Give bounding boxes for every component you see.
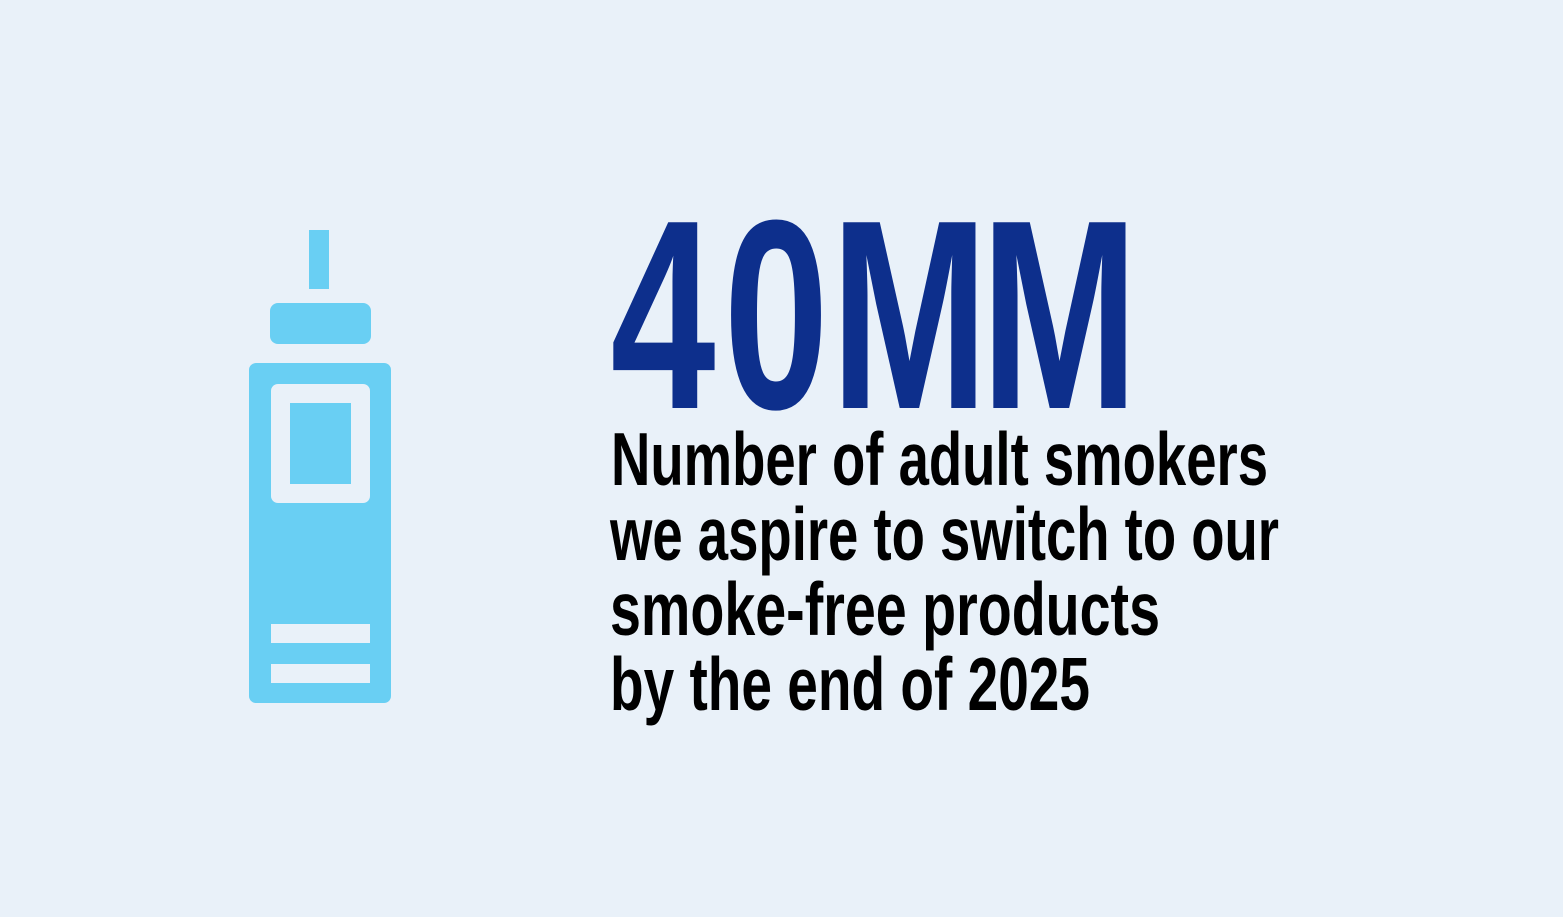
icon: e-vapor device: [249, 230, 391, 703]
headline number: 40MM: [610, 165, 1138, 466]
description text: we aspire to switch to our: [609, 492, 1279, 576]
description text: smoke-free products: [610, 567, 1160, 651]
description text: by the end of 2025: [610, 642, 1090, 726]
description text: Number of adult smokers: [611, 417, 1268, 501]
description text: [609, 417, 1279, 726]
